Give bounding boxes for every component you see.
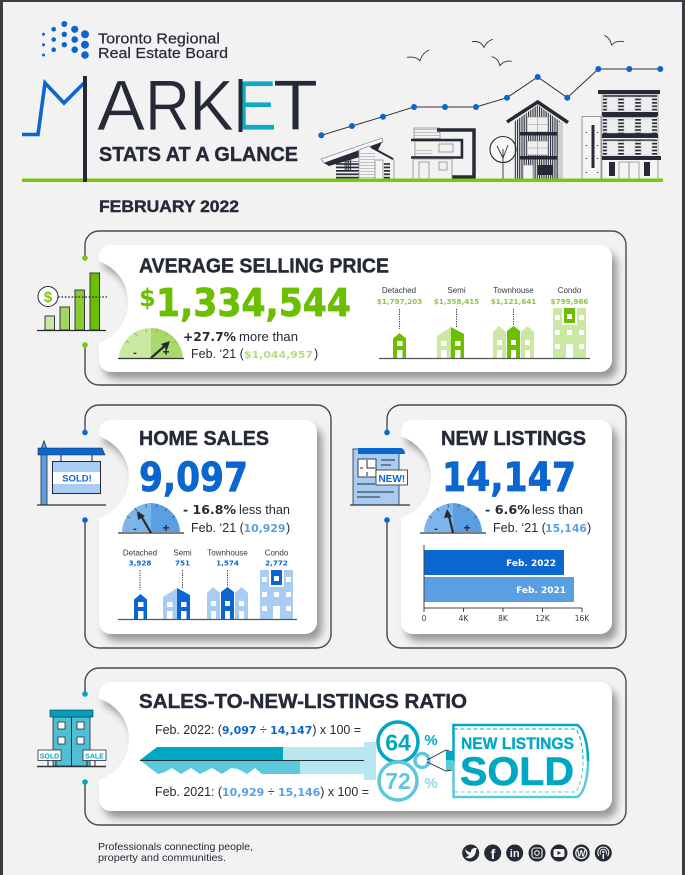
housing type prices: Condo: [558, 286, 582, 295]
social icons: f: [491, 846, 496, 862]
apartment building: [582, 90, 661, 179]
bar chart: 8K: [498, 614, 509, 623]
social icons: [462, 844, 612, 862]
sold tag: [446, 725, 588, 797]
title stem overlap: [83, 176, 87, 182]
change text: ): [286, 521, 290, 535]
birds: [407, 35, 624, 66]
gauge: +: [463, 521, 471, 535]
key graphic: [140, 742, 376, 780]
change text: more than: [239, 329, 298, 344]
housing type sales: [118, 548, 297, 620]
panel: home sales: [37, 405, 331, 648]
change text: $1,044,957: [244, 350, 313, 361]
panel: average selling price: [37, 231, 626, 385]
housing type prices: Townhouse: [493, 286, 534, 295]
housing type prices: Semi: [447, 286, 466, 295]
big number: 9,097: [139, 455, 248, 501]
logo: Toronto Regional Real Estate Board: Real Estate Board: [98, 45, 228, 62]
formula: Feb. 2022: Feb. 2022: (9,097 ÷ 14,147) x 100 =: [155, 723, 361, 737]
gauge: +: [162, 345, 170, 359]
big price: 1,334,544: [156, 281, 351, 326]
housing type prices: $1,121,641: [491, 297, 536, 306]
footer tagline: [98, 841, 253, 864]
change text: [183, 502, 290, 535]
housing type prices: $1,797,203: [377, 297, 422, 306]
white card: [99, 245, 612, 372]
bar chart: Feb. 2022: [506, 559, 556, 569]
housing type sales: 2,772: [265, 558, 288, 568]
ratio circle: 72%: 72: [385, 768, 411, 794]
icon: bars and dollar: $: [44, 289, 53, 306]
date: FEBRUARY 2022: [99, 197, 239, 216]
panel outline: [85, 231, 626, 385]
title: MARKET: T: [273, 67, 318, 146]
housing type sales: Detached: [123, 548, 157, 558]
big price: $: [139, 284, 156, 312]
white card: [401, 420, 612, 634]
tree: [490, 136, 516, 179]
heading: NEW LISTINGS: [441, 427, 586, 450]
icon: sold sign: SOLD!: [62, 474, 92, 484]
change text: +27.7%: [183, 330, 236, 344]
gauge: -: [434, 523, 438, 535]
gauge: -: [133, 523, 137, 535]
logo: Toronto Regional Real Estate Board: Toronto Regional: [98, 30, 220, 48]
subtitle: STATS AT A GLANCE: [99, 144, 298, 166]
ratio circle: 72%: [379, 762, 438, 800]
white card: [99, 682, 612, 811]
change text: 10,929: [244, 523, 286, 535]
trend line: [318, 66, 663, 138]
ratio circle: 64%: [378, 722, 438, 762]
bar chart: 12K: [535, 614, 551, 623]
change text: - 16.8%: [183, 503, 236, 517]
bar chart: 0: [422, 614, 427, 623]
heading: HOME SALES: [139, 427, 269, 450]
heading: SALES-TO-NEW-LISTINGS RATIO: [139, 690, 467, 713]
title: MARKET: R: [145, 67, 190, 146]
icon: listing document: [350, 448, 410, 505]
title: MARKET: E: [235, 67, 277, 146]
sold tag: SOLD: [460, 750, 574, 794]
housing type sales: 3,928: [129, 558, 151, 568]
footer tagline: Professionals connecting people,: [98, 841, 253, 853]
housing type sales: Townhouse: [207, 548, 248, 558]
footer tagline: property and communities.: [98, 852, 226, 864]
panel: new listings: [350, 405, 626, 648]
bar chart: Feb. 2021: [516, 586, 566, 596]
connector dots: [82, 255, 88, 348]
gauge: [118, 503, 184, 535]
skyline illustration with trend line: [318, 35, 663, 179]
bar chart: 4K: [459, 614, 469, 623]
change text: [183, 329, 318, 361]
green ground line: [22, 178, 663, 182]
big number: 14,147: [442, 455, 576, 501]
title: MARKET: [22, 67, 318, 182]
formula: Feb. 2021: Feb. 2021: (10,929 ÷ 15,146) x 100 =: [155, 785, 369, 799]
change text: [485, 502, 591, 535]
housing type prices: [377, 286, 590, 358]
house: modern: [411, 128, 474, 179]
housing type prices: Detached: [382, 286, 416, 295]
change text: ): [314, 347, 318, 361]
housing type sales: 1,574: [216, 558, 239, 568]
change text: 15,146: [545, 523, 587, 535]
gauge: [118, 328, 184, 359]
house: striped gable: [507, 102, 568, 179]
sold tag: NEW LISTINGS: [461, 734, 574, 753]
change text: less than: [532, 502, 583, 517]
change text: ): [587, 521, 591, 535]
ratio circle: 64%: %: [424, 732, 438, 749]
icon: sold sign: [37, 441, 106, 505]
housing type sales: Condo: [265, 548, 289, 558]
panel: sales-to-new-listings ratio: [37, 668, 626, 825]
icon: bars and dollar: [37, 273, 107, 330]
housing type sales: 751: [175, 558, 190, 568]
change text: - 6.6%: [485, 503, 530, 517]
key ring and tag string: [415, 750, 452, 771]
heading: AVERAGE SELLING PRICE: [139, 256, 389, 278]
house: shed roof: [321, 138, 394, 179]
bar chart: [422, 545, 590, 623]
icon: condo building with signs: SALE: [85, 754, 104, 760]
change text: Feb. ‘21 (: [191, 521, 245, 535]
gauge: [420, 503, 486, 535]
panel outline: [85, 668, 626, 825]
connector dots: [82, 430, 88, 523]
panel outline: [387, 405, 626, 648]
change text: less than: [239, 502, 290, 517]
icon: listing document: NEW!: [378, 474, 405, 485]
connector dots: [82, 691, 88, 785]
panel outline: [85, 405, 331, 648]
change text: Feb. ‘21 (: [493, 521, 547, 535]
housing type prices: $1,358,415: [434, 297, 479, 306]
connector dots: [384, 430, 390, 523]
ratio circle: 72%: %: [424, 775, 438, 792]
housing type sales: Semi: [173, 548, 192, 558]
housing type prices: $799,966: [551, 297, 588, 306]
title: MARKET: A: [97, 67, 146, 146]
social icons: in: [510, 848, 520, 860]
icon: condo building with signs: [37, 710, 106, 766]
bar chart: 16K: [575, 614, 590, 623]
title: MARKET: K: [189, 67, 234, 146]
gauge: +: [162, 521, 170, 535]
change text: Feb. ‘21 (: [191, 347, 245, 361]
icon: condo building with signs: SOLD: [40, 754, 59, 760]
logo: Toronto Regional Real Estate Board: [42, 21, 228, 62]
ratio circle: 64%: 64: [385, 730, 411, 756]
white card: [99, 420, 317, 634]
gauge: -: [133, 347, 137, 359]
social icons: W: [577, 848, 586, 858]
